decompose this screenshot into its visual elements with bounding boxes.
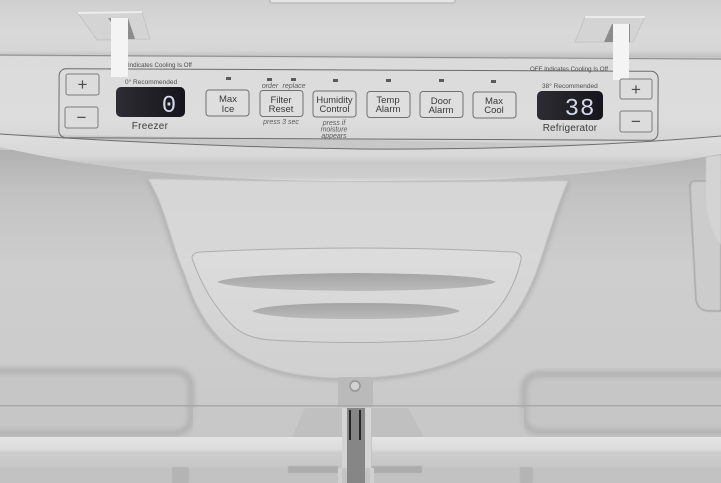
refrigerator label: Refrigerator [543, 123, 598, 134]
button: max ice: Max [219, 94, 237, 105]
button: humidity control: Humidity [316, 95, 353, 105]
freezer recommended label: 0° Recommended [125, 78, 177, 86]
function buttons [206, 77, 516, 140]
press notes: press if [322, 120, 346, 127]
upper vent slot [217, 273, 496, 291]
order and replace labels: order [262, 83, 279, 90]
button: temp alarm: Alarm [376, 104, 400, 115]
shelf back edge line [0, 405, 721, 406]
refrigerator recommended label: 38° Recommended [542, 82, 598, 90]
centre gap between shelves [338, 408, 374, 483]
right side wall fitting [690, 155, 721, 311]
freezer controls [65, 74, 185, 132]
button: max ice: Ice [222, 104, 234, 115]
button: max cool [473, 92, 516, 118]
right wall recess [524, 374, 721, 432]
lower lip of panel [0, 134, 721, 181]
left hinge bracket [78, 12, 150, 77]
refrigerator controls [537, 79, 652, 134]
top door frame band [0, 0, 721, 57]
right hinge bracket [575, 17, 645, 80]
cooling off notes: Indicates Cooling Is Off [128, 62, 192, 69]
button: filter reset: Filter [270, 95, 292, 106]
order and replace labels: replace [283, 83, 306, 90]
indicator lights [226, 77, 496, 83]
button: door alarm: Alarm [429, 105, 453, 116]
button: filter reset [260, 90, 303, 116]
control panel outline [59, 69, 658, 140]
freezer plus button: + [78, 75, 88, 94]
press notes: press 3 sec [262, 119, 299, 126]
press notes [262, 119, 348, 140]
freezer label: Freezer [132, 121, 169, 132]
left wall recess [0, 371, 191, 433]
refrigerator plus button: + [631, 80, 641, 99]
press notes: appears [321, 133, 347, 140]
button: filter reset: Reset [269, 104, 294, 115]
button: max ice [206, 90, 249, 116]
button: humidity control [313, 91, 356, 117]
button: door alarm [420, 92, 463, 118]
right shelf [365, 408, 721, 483]
centre mount with screw [338, 377, 373, 407]
order and replace labels [262, 83, 306, 90]
freezer display: 0 [162, 93, 176, 120]
button: humidity control: Control [320, 104, 349, 114]
air duct housing [148, 179, 568, 378]
interior back wall [0, 150, 721, 483]
button: door alarm: Door [431, 96, 451, 107]
cooling off notes: OFF Indicates Cooling Is Off [530, 66, 608, 73]
control panel body [0, 55, 721, 146]
lower vent slot [252, 303, 460, 319]
refrigerator minus button: − [631, 112, 641, 131]
freezer minus button: − [77, 108, 87, 127]
refrigerator display: 38 [565, 96, 595, 123]
button: max cool: Max [485, 96, 503, 107]
button: max cool: Cool [484, 105, 504, 116]
button: temp alarm: Temp [376, 95, 400, 106]
vent cover [192, 248, 521, 342]
left shelf [0, 408, 347, 483]
press notes: moisture [321, 126, 348, 134]
button: temp alarm [367, 92, 410, 118]
cooling off notes [128, 62, 608, 73]
